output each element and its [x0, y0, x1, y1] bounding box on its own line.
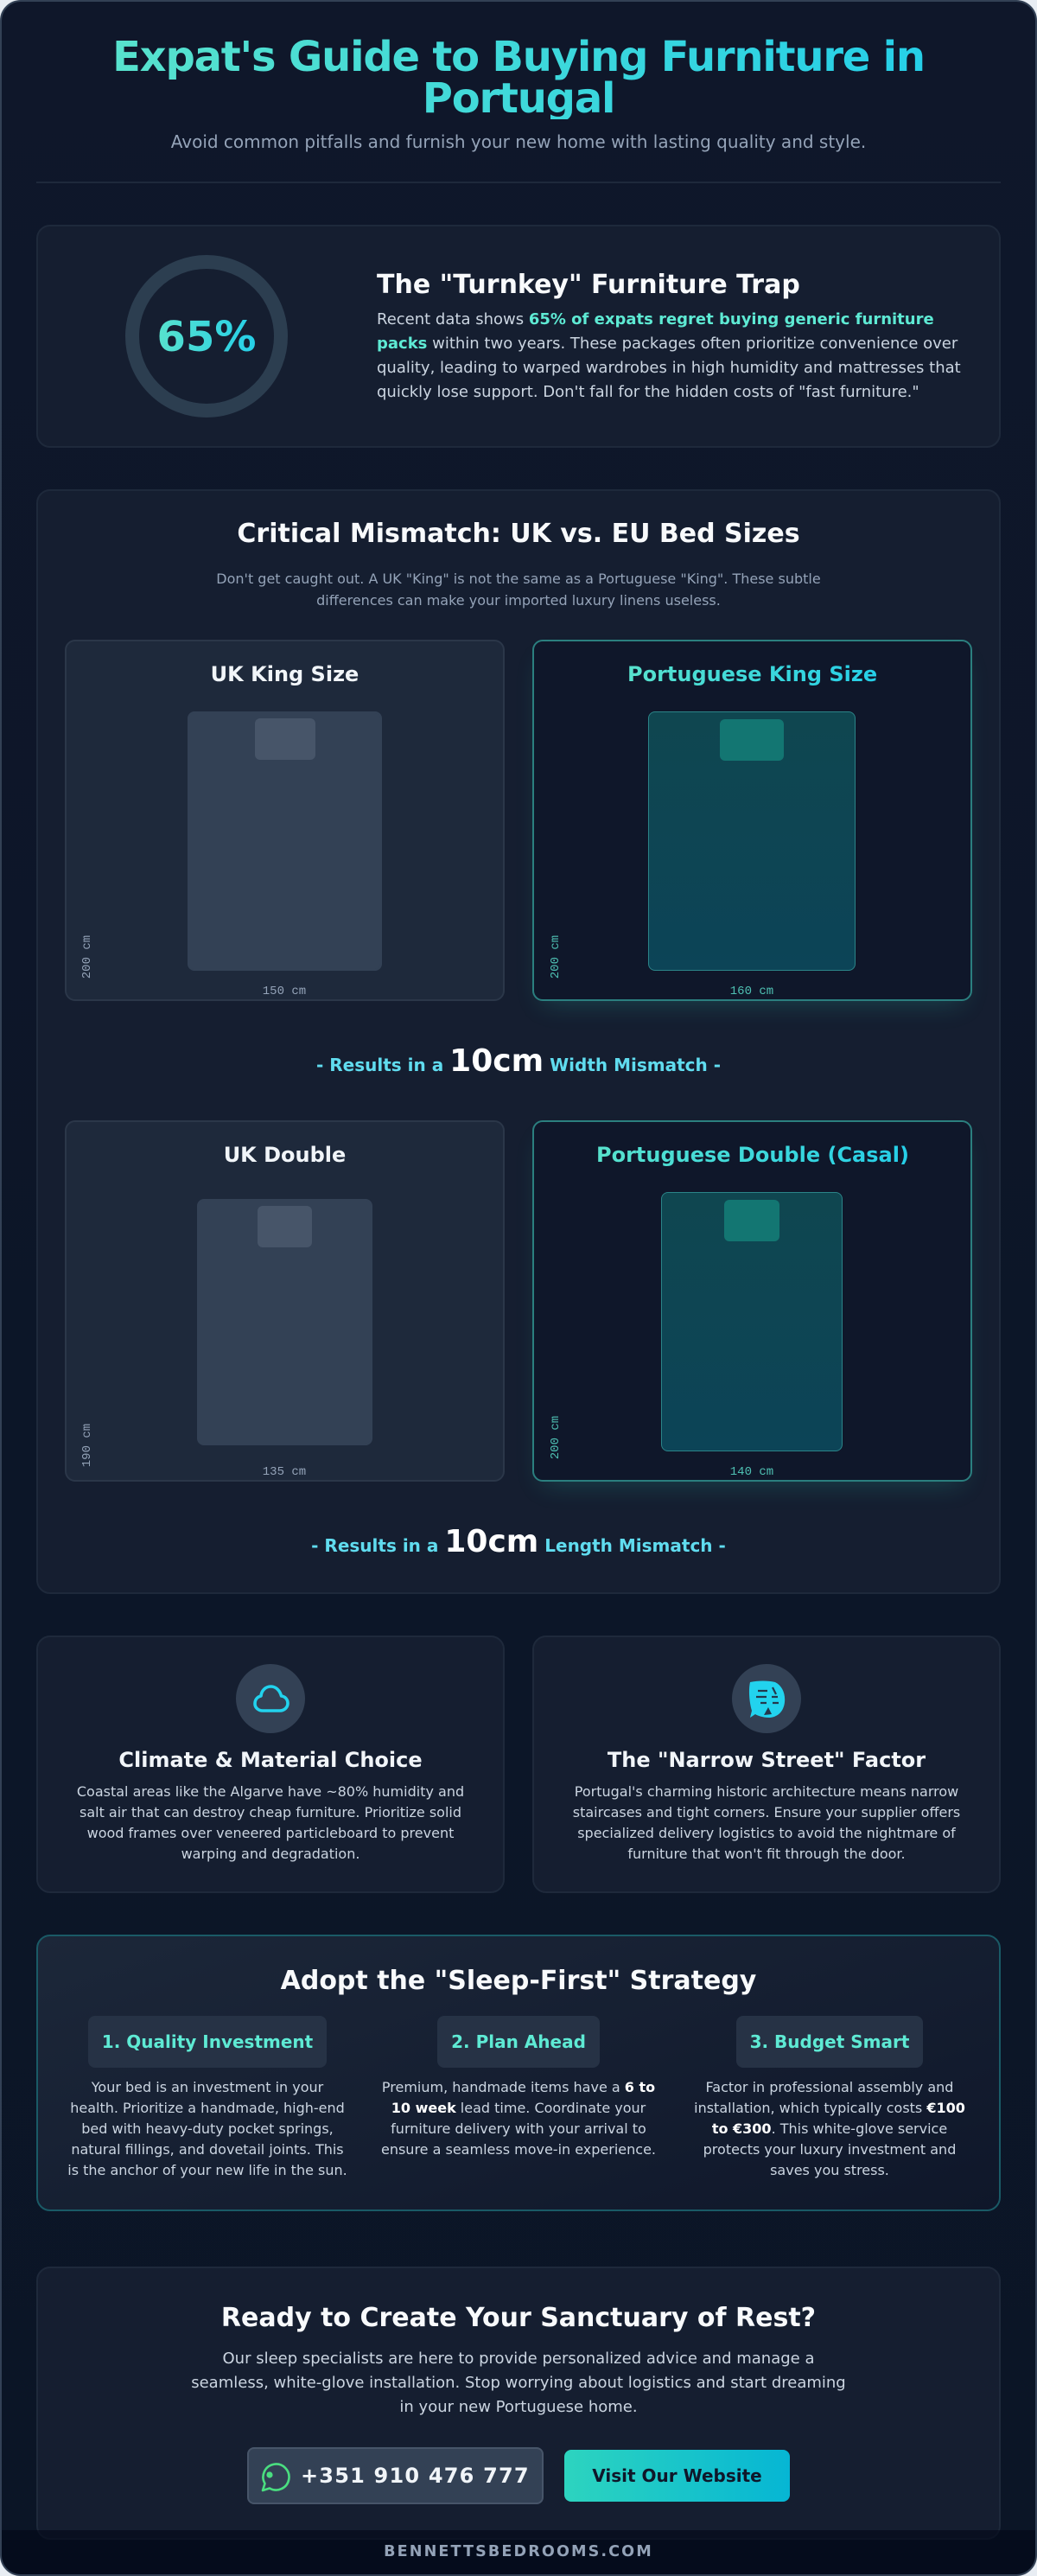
narrow street text: staircases and tight corners. Ensure your supplier offers [573, 1804, 960, 1820]
turnkey text: quality, leading to warped wardrobes in high humidity and mattresses that [377, 359, 961, 377]
panel: narrow street [532, 1636, 1001, 1893]
strategy heading: Adopt the "Sleep-First" Strategy [281, 1966, 756, 1996]
step 2 text: 10 week lead time. Coordinate your [391, 2100, 646, 2116]
UK King width: 150 cm [263, 985, 306, 998]
step 3 text: saves you stress. [770, 2162, 889, 2178]
UK Double width: 135 cm [263, 1465, 306, 1479]
step 2 label: 2. Plan Ahead [451, 2031, 586, 2052]
step 1 text: natural fillings, and dovetail joints. This [71, 2141, 344, 2158]
step 3 text [694, 2079, 965, 2178]
step 2 text: furniture delivery with your arrival to [391, 2120, 646, 2137]
card: UK King [65, 640, 505, 1001]
Portuguese King heading: Portuguese King Size [627, 662, 877, 686]
CTA text [191, 2350, 846, 2416]
CTA text: Our sleep specialists are here to provide personalized advice and manage a [223, 2350, 814, 2368]
climate heading: Climate & Material Choice [118, 1748, 423, 1772]
step 3 text: Factor in professional assembly and [706, 2079, 953, 2095]
subtitle: Avoid common pitfalls and furnish your new home with lasting quality and style. [171, 131, 866, 152]
comparison intro: Don't get caught out. A UK "King" is not the same as a Portuguese "King". These subtle [216, 571, 821, 587]
width mismatch callout: - Results in a 10cm Width Mismatch - [316, 1043, 721, 1079]
card: Portuguese King [532, 640, 972, 1001]
card: Portuguese Double [532, 1120, 972, 1482]
Portuguese King bed [648, 711, 856, 971]
UK Double pillow [258, 1206, 312, 1247]
UK Double heading: UK Double [224, 1143, 346, 1167]
step 1 text: is the anchor of your new life in the sun. [67, 2162, 347, 2178]
turnkey heading: The "Turnkey" Furniture Trap [377, 270, 800, 300]
Portuguese Double width: 140 cm [730, 1465, 773, 1479]
step 1 text [67, 2079, 347, 2178]
step 1 label [88, 2016, 327, 2068]
climate text: warping and degradation. [181, 1846, 359, 1862]
turnkey text [377, 310, 961, 401]
climate text [77, 1783, 464, 1862]
panel: turnkey trap [36, 225, 1001, 448]
icon: whatsapp [261, 2463, 290, 2491]
UK Double length: 190 cm [80, 1424, 94, 1467]
length mismatch callout: - Results in a 10cm Length Mismatch - [311, 1524, 726, 1559]
header divider [36, 182, 1001, 183]
step 2 text: Premium, handmade items have a 6 to [382, 2079, 655, 2095]
turnkey text: quickly lose support. Don't fall for the hidden costs of "fast furniture." [377, 383, 919, 401]
title: Portugal [423, 74, 614, 123]
step 2 text: ensure a seamless move-in experience. [381, 2141, 656, 2158]
step 3 text: to €300. This white-glove service [712, 2120, 947, 2137]
step 3 label: 3. Budget Smart [750, 2031, 909, 2052]
Portuguese King pillow [720, 719, 784, 761]
turnkey text: Recent data shows 65% of expats regret buying generic furniture [377, 310, 934, 328]
step 1 text: bed with heavy-duty pocket springs, [81, 2120, 334, 2137]
title: Expat's Guide to Buying Furniture in [112, 33, 925, 81]
card: UK Double [65, 1120, 505, 1482]
narrow street text: furniture that won't fit through the door. [627, 1846, 906, 1862]
icon: street map bubble [732, 1664, 801, 1733]
website button [564, 2450, 790, 2502]
UK King pillow [255, 718, 315, 760]
comparison heading: Critical Mismatch: UK vs. EU Bed Sizes [237, 519, 800, 549]
panel: bed size comparison [36, 489, 1001, 1594]
step 1 text: health. Prioritize a handmade, high-end [70, 2100, 345, 2116]
CTA text: seamless, white-glove installation. Stop worrying about logistics and start dreaming [191, 2374, 846, 2392]
step 3 text: protects your luxury investment and [703, 2141, 956, 2158]
comparison intro: differences can make your imported luxury linens useless. [316, 591, 721, 609]
icon: cloud [236, 1664, 305, 1733]
turnkey text: packs within two years. These packages often prioritize convenience over [377, 335, 957, 353]
UK King heading: UK King Size [211, 662, 359, 686]
title [104, 36, 933, 119]
Portuguese King length: 200 cm [549, 935, 563, 979]
narrow street text: Portugal's charming historic architecture means narrow [575, 1783, 958, 1800]
CTA heading: Ready to Create Your Sanctuary of Rest? [221, 2303, 816, 2333]
footer brand: BENNETTSBEDROOMS.COM [384, 2543, 653, 2560]
climate text: Coastal areas like the Algarve have ~80% humidity and [77, 1783, 464, 1800]
phone button [247, 2447, 544, 2504]
narrow street text [573, 1783, 960, 1862]
step 3 text: installation, which typically costs €100 [694, 2100, 965, 2116]
Portuguese Double heading: Portuguese Double (Casal) [596, 1143, 909, 1167]
UK Double bed [197, 1199, 372, 1445]
Portuguese Double length: 200 cm [549, 1416, 563, 1459]
step 2 label [437, 2016, 600, 2068]
UK King bed [188, 711, 382, 971]
climate text: wood frames over veneered particleboard to prevent [87, 1825, 454, 1841]
panel: sleep-first strategy [36, 1935, 1001, 2211]
CTA text: in your new Portuguese home. [399, 2398, 638, 2416]
narrow street text: specialized delivery logistics to avoid the nightmare of [577, 1825, 956, 1841]
Portuguese Double bed [661, 1192, 843, 1451]
climate text: salt air that can destroy cheap furniture. Prioritize solid [80, 1804, 461, 1820]
Portuguese Double pillow [724, 1200, 779, 1241]
stat ring: 65% [125, 255, 288, 418]
narrow street heading: The "Narrow Street" Factor [608, 1748, 926, 1772]
stat value: 65% [157, 313, 256, 361]
phone number: +351 910 476 777 [301, 2464, 530, 2488]
step 2 text [381, 2079, 656, 2158]
step 1 text: Your bed is an investment in your [92, 2079, 323, 2095]
panel: call to action [36, 2267, 1001, 2540]
panel: climate [36, 1636, 505, 1893]
Portuguese King width: 160 cm [730, 985, 773, 998]
website button: Visit Our Website [592, 2465, 762, 2486]
UK King length: 200 cm [80, 935, 94, 979]
comparison intro [216, 571, 821, 609]
step 3 label [736, 2016, 923, 2068]
step 1 label: 1. Quality Investment [102, 2031, 313, 2052]
footer [0, 2530, 1037, 2576]
